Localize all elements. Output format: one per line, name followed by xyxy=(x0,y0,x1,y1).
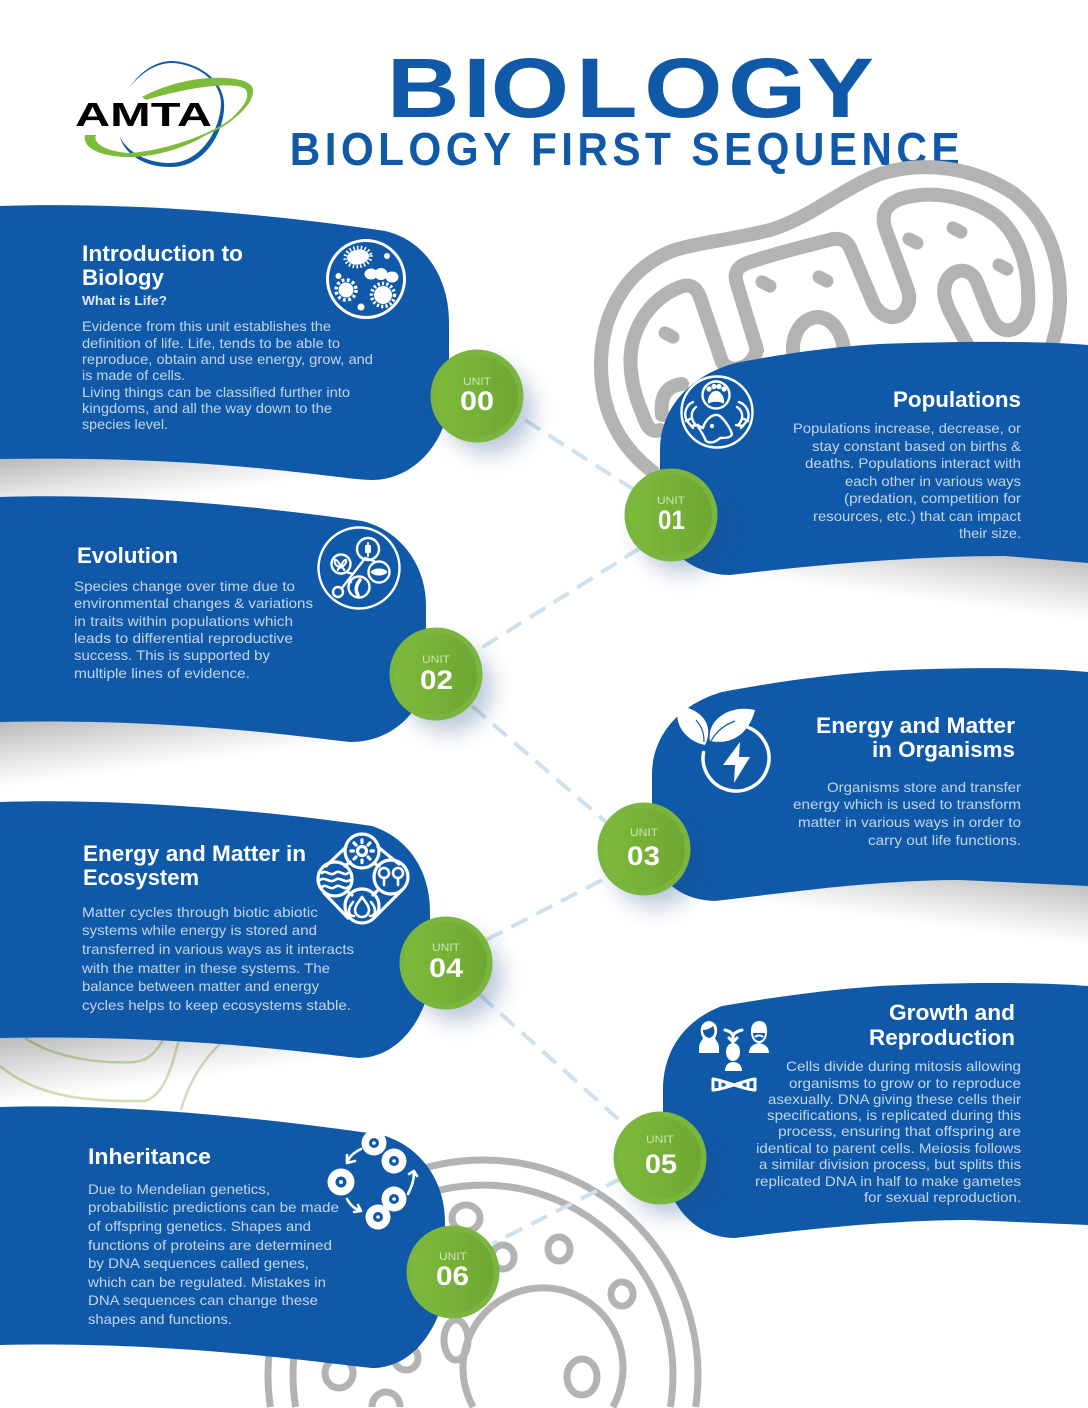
body text: balance between matter and energy xyxy=(82,978,319,994)
panel: unit 03 energy and matter in organisms xyxy=(652,668,1088,901)
body text: (predation, competition for xyxy=(844,490,1021,506)
body text: replicated DNA in half to make gametes xyxy=(755,1173,1021,1189)
logo wordmark: AMTA xyxy=(75,96,212,133)
mitochondrion granules xyxy=(656,219,1016,346)
body text: in traits within populations which xyxy=(74,613,293,629)
unit badge 05: UNIT xyxy=(646,1134,674,1146)
body text: shapes and functions. xyxy=(88,1311,232,1327)
body text: transferred in various ways as it interacts xyxy=(82,941,354,957)
body text: reproduce, obtain and use energy, grow, and xyxy=(82,351,373,367)
unit badge 04 xyxy=(400,916,502,1021)
logo: AMTA xyxy=(75,61,253,167)
subtitle: BIOLOGY FIRST SEQUENCE xyxy=(290,124,960,175)
unit badge 04: 04 xyxy=(429,953,463,983)
panel shape xyxy=(663,983,1088,1238)
background illustration: cell xyxy=(268,1160,698,1407)
panel shape xyxy=(0,1106,445,1368)
body text: environmental changes & variations xyxy=(74,595,313,611)
panel shape xyxy=(0,205,449,480)
body text: deaths. Populations interact with xyxy=(805,455,1021,471)
panel: unit 02 evolution xyxy=(0,496,426,742)
icon: microbes in petri dish xyxy=(328,240,404,318)
body text: species level. xyxy=(82,416,168,432)
panel: unit 06 inheritance xyxy=(0,1106,445,1368)
heading: Inheritance xyxy=(88,1144,211,1169)
body text xyxy=(87,1181,339,1327)
body text: their size. xyxy=(959,525,1021,541)
heading xyxy=(82,241,243,308)
panel: unit 01 populations xyxy=(660,342,1088,575)
body text: organisms to grow or to reproduce xyxy=(789,1075,1021,1091)
panel shape xyxy=(0,801,430,1058)
icon: ecosystem cycle xyxy=(318,834,408,923)
body text xyxy=(793,779,1021,848)
unit badge 02: UNIT xyxy=(422,654,450,666)
heading: Introduction to xyxy=(82,241,243,266)
unit badge 00: UNIT xyxy=(463,376,491,388)
panel: unit 00 introduction to biology xyxy=(0,205,449,480)
unit badge 04: UNIT xyxy=(432,942,460,954)
body text xyxy=(793,420,1022,541)
icon: parents, offspring and DNA xyxy=(699,1021,769,1090)
body text: a similar division process, but splits this xyxy=(759,1156,1021,1172)
body text: probabilistic predictions can be made xyxy=(88,1199,339,1215)
background illustration: green contour lines xyxy=(0,1036,226,1110)
body text xyxy=(755,1058,1021,1205)
body text: which can be regulated. Mistakes in xyxy=(87,1274,326,1290)
heading: Energy and Matter in xyxy=(83,841,306,866)
body text: specifications, is replicated during this xyxy=(767,1107,1021,1123)
unit badge 01: 01 xyxy=(658,505,685,535)
panel: unit 04 energy and matter in ecosystem xyxy=(0,801,430,1058)
title: BIOLOGY xyxy=(387,41,874,135)
body text: resources, etc.) that can impact xyxy=(813,508,1021,524)
panel shape xyxy=(652,668,1088,901)
heading: Biology xyxy=(82,265,165,290)
icon: animal populations xyxy=(682,376,752,448)
body text: Living things can be classified further into xyxy=(82,384,350,400)
heading: Evolution xyxy=(77,543,178,568)
heading: Populations xyxy=(893,387,1021,412)
unit badge 05: 05 xyxy=(645,1149,677,1179)
body text: carry out life functions. xyxy=(868,832,1021,848)
body text: asexually. DNA giving these cells their xyxy=(768,1091,1021,1107)
body text: systems while energy is stored and xyxy=(82,922,317,938)
body text: by DNA sequences called genes, xyxy=(88,1255,309,1271)
unit badge 03: 03 xyxy=(627,841,660,871)
body text: matter in various ways in order to xyxy=(798,814,1021,830)
body text: Due to Mendelian genetics, xyxy=(88,1181,270,1197)
heading xyxy=(816,713,1015,762)
heading xyxy=(83,841,306,890)
body text: identical to parent cells. Meiosis follows xyxy=(756,1140,1021,1156)
body text: functions of proteins are determined xyxy=(88,1237,332,1253)
panel shape xyxy=(0,496,426,742)
unit badge 03 xyxy=(598,802,700,907)
body text: stay constant based on births & xyxy=(812,438,1022,454)
unit badge 01 xyxy=(624,468,727,573)
panel: unit 05 growth and reproduction xyxy=(663,983,1088,1238)
unit badge 06: 06 xyxy=(436,1261,469,1291)
body text: with the matter in these systems. The xyxy=(81,960,330,976)
unit badge 02 xyxy=(390,628,492,732)
body text: is made of cells. xyxy=(82,367,185,383)
body text: multiple lines of evidence. xyxy=(74,665,250,681)
icon: tree of life xyxy=(318,528,400,608)
unit badge 00: 00 xyxy=(460,386,494,416)
body text: Species change over time due to xyxy=(74,578,295,594)
unit badge 06 xyxy=(406,1226,500,1318)
body text: definition of life. Life, tends to be able to xyxy=(82,335,340,351)
heading xyxy=(869,1000,1015,1050)
body text: Organisms store and transfer xyxy=(827,779,1021,795)
body text: leads to differential reproductive xyxy=(74,630,293,646)
logo blue orbit xyxy=(120,61,224,167)
body text: Populations increase, decrease, or xyxy=(793,420,1021,436)
card shadows xyxy=(0,450,1088,1103)
icon: cell division cycle xyxy=(328,1130,417,1230)
body text: of offspring genetics. Shapes and xyxy=(88,1218,311,1234)
body text: Evidence from this unit establishes the xyxy=(82,318,331,334)
heading: Reproduction xyxy=(869,1025,1015,1050)
body text: cycles helps to keep ecosystems stable. xyxy=(82,997,351,1013)
unit badge 01: UNIT xyxy=(657,495,685,507)
body text xyxy=(82,318,373,432)
body text xyxy=(74,578,313,681)
heading: in Organisms xyxy=(872,737,1015,762)
body text: Matter cycles through biotic abiotic xyxy=(82,904,318,920)
heading: Growth and xyxy=(889,1000,1015,1025)
body text: process, ensuring that offspring are xyxy=(778,1123,1021,1139)
heading: Energy and Matter xyxy=(816,713,1015,738)
body text: Cells divide during mitosis allowing xyxy=(786,1058,1021,1074)
connector: dashed path between units xyxy=(472,420,640,1244)
unit badge 03: UNIT xyxy=(630,827,658,839)
unit badge 02: 02 xyxy=(420,665,453,695)
panel shape xyxy=(660,342,1088,575)
body text: for sexual reproduction. xyxy=(864,1189,1021,1205)
unit badge 05 xyxy=(614,1112,716,1216)
body text: success. This is supported by xyxy=(74,647,270,663)
body text: DNA sequences can change these xyxy=(88,1292,318,1308)
unit badge 06: UNIT xyxy=(439,1251,467,1263)
unit badge 00 xyxy=(430,350,533,454)
body text: energy which is used to transform xyxy=(793,796,1021,812)
heading: What is Life? xyxy=(82,293,167,308)
body text: each other in various ways xyxy=(845,473,1021,489)
body text: kingdoms, and all the way down to the xyxy=(82,400,332,416)
background illustration: mitochondrion xyxy=(601,167,1060,472)
icon: leaves and energy bolt xyxy=(677,706,769,791)
heading: Ecosystem xyxy=(83,865,199,890)
logo green swoosh xyxy=(85,78,253,157)
body text xyxy=(81,904,354,1013)
